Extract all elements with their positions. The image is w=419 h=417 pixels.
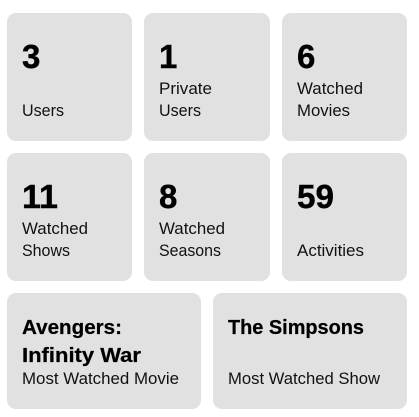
card: private users: [144, 13, 270, 141]
card: activities: Activities: [297, 242, 364, 260]
card: watched shows: Watched: [22, 220, 88, 238]
card: users: [7, 13, 132, 141]
card: most watched show: Most Watched Show: [228, 370, 380, 388]
card: watched shows: 11: [22, 178, 58, 215]
card: watched seasons: 8: [159, 178, 177, 215]
card: watched seasons: Seasons: [159, 242, 221, 260]
card: watched seasons: Watched: [159, 220, 225, 238]
card: users: Users: [22, 102, 64, 120]
card: most watched show: [213, 293, 407, 409]
card: most watched movie: [7, 293, 201, 409]
card: private users: Users: [159, 102, 201, 120]
card: private users: Private: [159, 80, 212, 98]
card: most watched movie: Most Watched Movie: [22, 370, 179, 388]
card: most watched movie: Infinity War: [22, 344, 141, 367]
card: most watched movie: Avengers:: [22, 316, 122, 339]
card: watched shows: [7, 153, 132, 281]
card: watched shows: Shows: [22, 242, 70, 260]
card: most watched show: The Simpsons: [228, 316, 364, 339]
card: activities: 59: [297, 178, 334, 215]
card: watched movies: [282, 13, 407, 141]
card: watched movies: Movies: [297, 102, 350, 120]
card: watched movies: Watched: [297, 80, 363, 98]
card: watched seasons: [144, 153, 270, 281]
card: activities: [282, 153, 407, 281]
card: private users: 1: [159, 38, 177, 75]
card: watched movies: 6: [297, 38, 315, 75]
card: users: 3: [22, 38, 40, 75]
